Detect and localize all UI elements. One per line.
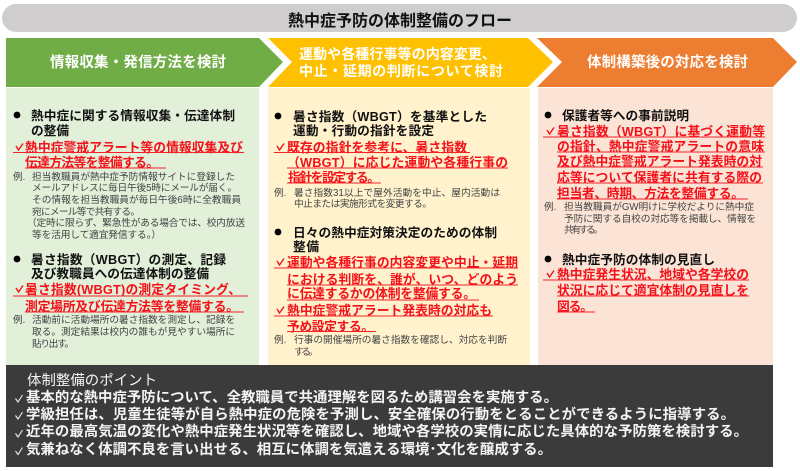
panel: post-setup response [538, 88, 773, 365]
key point 4: 気兼ねなく体調不良を言い出せる、相互に体調を気遣える環境･文化を醸成する。 [26, 440, 552, 458]
arrow header: step 1 [6, 38, 283, 87]
section: daily decision system: 例. [274, 333, 286, 346]
section: WBGT based guidelines [274, 109, 508, 210]
section: daily decision system: 運動や各種行事の内容変更や中止・延期 [287, 255, 518, 270]
section: heat information system [13, 108, 245, 241]
panel: information gathering [6, 88, 259, 365]
title bar: 熱中症予防の体制整備のフロー [288, 12, 512, 30]
section: guardian briefing: 予防に関する自校の対応等を掲載し、情報を [564, 212, 756, 225]
section: WBGT measurement: 及び教職員への伝達体制の整備 [31, 266, 209, 281]
section: daily decision system: 熱中症警戒アラート発表時の対応も [287, 303, 492, 318]
section: WBGT measurement: 取る。測定結果は校内の誰もが見やすい場所に [32, 325, 235, 338]
section: WBGT measurement: 活動前に活動場所の暑さ指数を測定し、記録を [32, 313, 235, 326]
section: WBGT based guidelines: 運動・行動の指針を設定 [293, 123, 434, 138]
key point 2: 学級担任は、児童生徒等が自ら熱中症の危険を予測し、安全確保の行動をとることができるように指導する。 [26, 405, 735, 423]
section: WBGT measurement: 測定場所及び伝達方法等を整備する。 [25, 299, 239, 314]
section: WBGT measurement: 暑さ指数(WBGT)の測定タイミング、 [25, 282, 241, 297]
section: guardian briefing: 共有する。 [564, 223, 603, 236]
section: heat information system: 熱中症警戒アラート等の情報収集及び [25, 140, 243, 155]
section: WBGT based guidelines: 暑さ指数31以上で屋外活動を中止、屋内活動は [294, 186, 500, 199]
section: daily decision system: に伝達するかの体制を整備する。 [287, 286, 476, 301]
section: daily decision system: 行事の開催場所の暑さ指数を確認し、対応を判断 [294, 333, 507, 346]
section: heat information system: 例. [13, 170, 25, 183]
section: WBGT measurement: 例. [13, 313, 25, 326]
section: WBGT based guidelines: 暑さ指数（WBGT）を基準とした [293, 109, 487, 124]
section: heat information system: メールアドレスに毎日午後5時にメールが届く。 [32, 181, 237, 194]
arrow header: step 1: 情報収集・発信方法を検討 [50, 53, 226, 71]
arrow header: step 2: 運動や各種行事等の内容変更、 [299, 46, 496, 62]
key point 3: 近年の最高気温の変化や熱中症発生状況等を確認し、地域や各学校の実情に応じた具体的な予防策を検討する。 [26, 422, 748, 440]
section: WBGT measurement: 貼り出す。 [32, 337, 74, 350]
section: WBGT based guidelines: 中止または実施形式を変更する。 [294, 197, 432, 210]
section: guardian briefing: 及び熱中症警戒アラート発表時の対 [557, 154, 762, 169]
panel: activity guidelines [268, 88, 530, 365]
section: guardian briefing [543, 108, 765, 236]
section: heat information system: （定時に限らず、緊急性がある場合では、校内放送 [27, 216, 245, 229]
section: review of system: 熱中症発生状況、地域や各学校の [557, 267, 749, 282]
section: heat information system: 宛にメール等で共有する。 [32, 205, 140, 218]
section: daily decision system: する。 [294, 346, 318, 358]
section: WBGT based guidelines: 既存の指針を参考に、暑さ指数 [287, 140, 467, 155]
section: daily decision system [274, 225, 518, 358]
key point 1: 基本的な熱中症予防について、全教職員で共通理解を図るため講習会を実施する。 [26, 388, 558, 406]
section: heat information system: 熱中症に関する情報収集・伝達体制 [31, 108, 235, 123]
section: review of system: 熱中症予防の体制の見直し [562, 252, 715, 267]
section: guardian briefing: 応等について保護者に共有する際の [557, 170, 762, 185]
section: daily decision system: における判断を、誰が、いつ、どのよう [287, 272, 518, 287]
section: heat information system: 伝達方法等を整備する。 [25, 155, 159, 170]
section: WBGT measurement [13, 252, 248, 350]
section: review of system: 状況に応じて適宜体制の見直しを [557, 283, 749, 298]
arrow header: step 2: 中止・延期の判断について検討 [299, 63, 503, 79]
section: guardian briefing: 保護者等への事前説明 [562, 108, 689, 123]
section: daily decision system: 日々の熱中症対策決定のための体制 [293, 225, 497, 240]
panel: key points [6, 365, 773, 467]
section: review of system [543, 252, 749, 314]
section: review of system: 図る。 [557, 299, 593, 314]
section: guardian briefing: 担当者、時期、方法を整備する。 [557, 186, 744, 201]
section: WBGT based guidelines: 指針を設定する。 [288, 170, 380, 185]
section: heat information system: その情報を担当教職員が毎日午後6時に全教職員 [32, 193, 241, 206]
section: WBGT based guidelines: （WBGT）に応じた運動や各種行事の [287, 155, 508, 170]
section: daily decision system: 予め設定する。 [287, 319, 374, 334]
key points heading: 体制整備のポイント [27, 372, 157, 389]
arrow header: step 3 [537, 38, 797, 87]
section: daily decision system: 整備 [293, 239, 319, 254]
section: WBGT measurement: 暑さ指数（WBGT）の測定、記録 [31, 252, 226, 267]
section: heat information system: 担当教職員が熱中症予防情報サイトに登録した [32, 170, 235, 183]
section: guardian briefing: の指針、熱中症警戒アラートの意味 [557, 139, 764, 154]
title bar [2, 4, 797, 32]
arrow header: step 2 [268, 38, 553, 87]
section: guardian briefing: 例. [544, 200, 556, 213]
section: guardian briefing: 担当教職員がGW明けに学校だよりに熱中症 [564, 200, 754, 213]
section: WBGT based guidelines: 例. [274, 186, 286, 199]
section: heat information system: 等を活用して適宜発信する。） [32, 228, 161, 241]
section: guardian briefing: 暑さ指数（WBGT）に基づく運動等 [557, 124, 765, 139]
section: heat information system: の整備 [31, 123, 69, 138]
arrow header: step 3: 体制構築後の対応を検討 [587, 53, 748, 71]
